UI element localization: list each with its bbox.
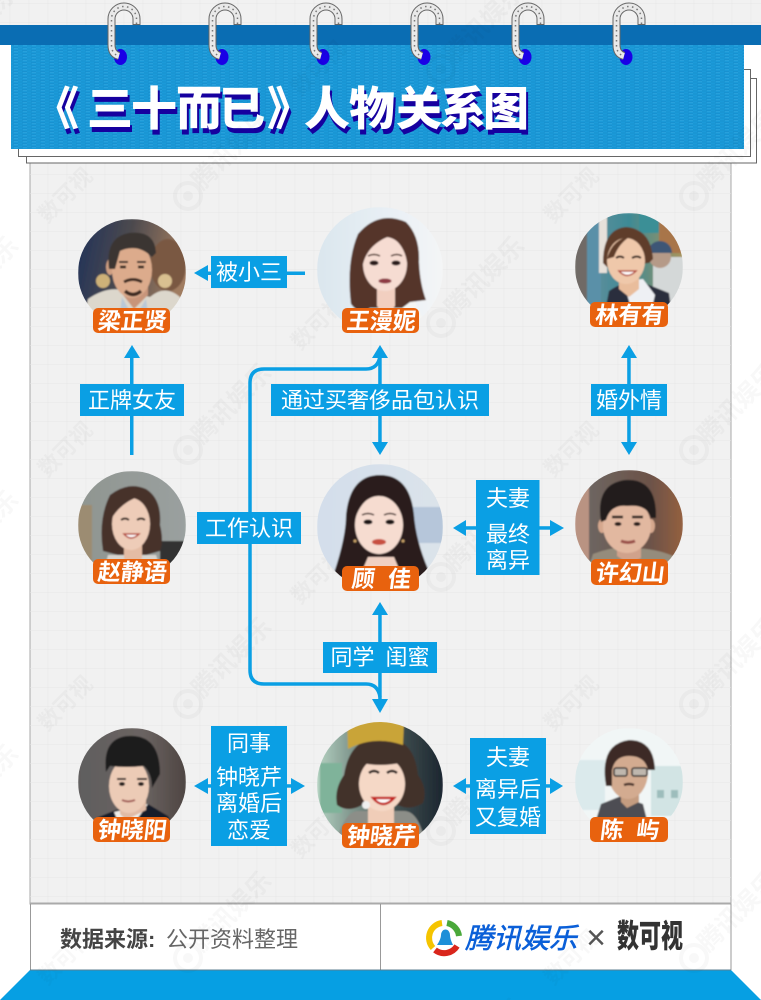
node: 顾佳 [317,464,443,592]
label: 又复婚 [475,805,541,830]
portrait [317,208,443,320]
portrait [317,722,443,835]
paper sheets behind header [18,70,756,163]
node: 钟晓阳 [78,728,186,843]
name tag: 赵静语 [96,559,169,585]
name tag: 钟晓芹 [345,823,418,849]
connector: Gu and Zhong Xiaoqin [323,602,437,713]
label: 婚外情 [596,388,662,413]
binder holes [114,49,632,65]
label [211,726,287,846]
node: 陈屿 [575,728,683,843]
label: 同学 闺蜜 [330,645,430,670]
panel: header banner [0,6,761,149]
title: 《三十而已》人物关系图 [35,88,531,140]
name tag: 王漫妮 [345,308,418,334]
connector: Zhong Xiaoqin and Chen [453,738,563,834]
label: 钟晓芹 [216,765,282,790]
label [476,480,540,575]
logo: Tencent Entertainment: 腾讯娱乐 [465,923,579,954]
connector: Wang to Liang [194,256,305,288]
bottom blue base [0,970,761,1000]
portrait [78,219,186,312]
name tag: 陈 屿 [599,817,661,843]
footer panel [30,903,731,970]
label: 通过买奢侈品包认识 [281,388,479,413]
connector: Wang and Gu [271,345,489,455]
label: 夫妻 [486,486,530,511]
node: 王漫妮 [317,207,443,334]
name tag: 许幻山 [594,560,667,586]
label: 正牌女友 [88,388,176,413]
title: 《三十而已》人物关系图 [33,83,529,135]
label: 离婚后 [216,791,282,816]
connector: work acquaintance curve [197,356,380,697]
label [470,738,546,834]
label: 离异后 [475,777,541,802]
portrait [78,471,186,564]
name tag: 梁正贤 [96,308,169,334]
portrait [575,470,683,563]
connector: Zhao to Liang [80,345,184,455]
times sign: × [586,919,606,957]
node: 梁正贤 [78,219,186,334]
label: 同事 [227,731,271,756]
name tag: 钟晓阳 [96,817,169,843]
label: 夫妻 [486,745,530,770]
label [197,512,301,544]
panel: grid canvas [30,150,731,904]
data source text: 公开资料整理 [166,927,298,952]
portrait [575,213,683,305]
connector: Zhong Xiaoyang and Zhong Xiaoqin [194,726,305,846]
name tag: 林有有 [594,302,666,328]
label: 最终 [486,522,530,547]
node: 许幻山 [575,470,683,586]
portrait [575,728,683,817]
name tag: 顾 佳 [350,566,413,592]
data source text: 数据来源: [60,927,155,952]
node: 钟晓芹 [317,721,443,849]
portrait [78,728,186,821]
label: 被小三 [216,260,282,285]
portrait [317,464,443,577]
node: 赵静语 [78,471,186,585]
connector: Lin and Xu [591,345,667,455]
label: 恋爱 [227,818,271,843]
logo: data viz: 数可视 [617,918,683,954]
node: 林有有 [575,213,683,328]
label: 工作认识 [205,516,293,541]
connector: Gu and Xu [453,480,564,575]
label: 离异 [486,548,530,573]
binder rings [112,6,642,56]
